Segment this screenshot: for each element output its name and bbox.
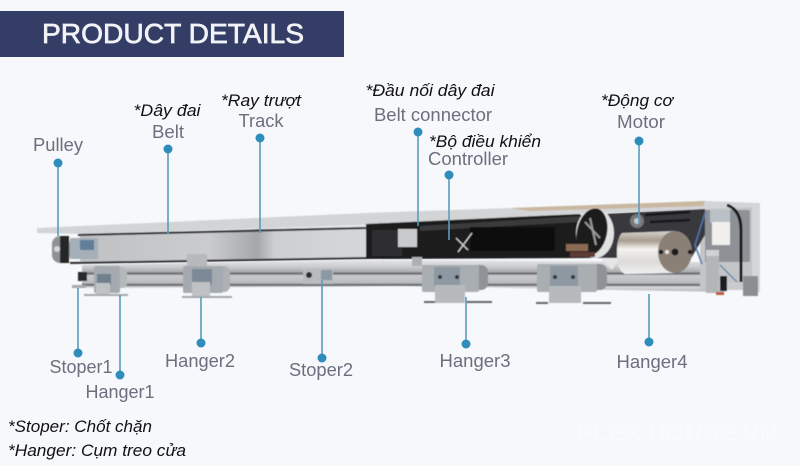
- callout: Hanger2: Hanger2: [165, 351, 235, 371]
- callout: Motor: [601, 91, 675, 224]
- callout: Controller: Controller: [428, 149, 508, 169]
- callout: Track: [221, 91, 302, 233]
- title: PRODUCT DETAILS: [42, 18, 304, 49]
- footnotes: *Stoper: Chốt chặn: [8, 417, 152, 436]
- callout: Hanger2: [165, 297, 235, 371]
- right wall: [752, 204, 760, 293]
- footnotes: *Hanger: Cụm treo cửa: [8, 441, 186, 460]
- controller: [366, 214, 585, 266]
- callout: Motor: *Động cơ: [601, 91, 675, 110]
- belt: [70, 228, 368, 263]
- callout: Hanger3: [440, 297, 510, 371]
- callout: Controller: *Bộ điều khiển: [429, 132, 541, 151]
- callout: Pulley: Pulley: [33, 135, 83, 155]
- door operator machine: [37, 201, 760, 304]
- callout: Hanger1: [86, 295, 154, 402]
- callout: Belt connector: [366, 81, 496, 226]
- watermark: FLEX HOUSE.VN: [577, 420, 777, 446]
- stoper 1: [72, 272, 87, 288]
- callout: Controller: [428, 132, 541, 240]
- callout: Motor: Motor: [617, 112, 665, 132]
- right interior: [700, 204, 758, 290]
- lower rail: [82, 260, 725, 292]
- callout: Stoper2: [289, 280, 353, 380]
- callout: Stoper1: [50, 288, 112, 377]
- motor bay: [580, 209, 705, 260]
- hanger 4: [536, 264, 611, 304]
- callout: Stoper2: Stoper2: [289, 360, 353, 380]
- callout: Pulley: [33, 135, 83, 236]
- top cover plate: [37, 201, 760, 234]
- callout: Track: Track: [238, 111, 285, 131]
- callout: Stoper1: Stoper1: [50, 357, 112, 377]
- right bracket: [695, 205, 758, 296]
- hanger 1: [84, 266, 128, 296]
- callout: Belt connector: *Đầu nối dây đai: [366, 81, 496, 100]
- track body: [80, 226, 366, 262]
- stoper 2: [303, 270, 333, 284]
- callout: Belt connector: Belt connector: [374, 105, 492, 125]
- callout: Belt: Belt: [152, 122, 184, 142]
- hanger 2: [182, 254, 232, 298]
- pulley: [52, 236, 98, 263]
- gear wheel: [566, 205, 614, 259]
- callout: Hanger1: Hanger1: [86, 382, 154, 402]
- callout: Track: *Ray trượt: [221, 91, 302, 110]
- callout: Belt: [134, 101, 202, 234]
- motor: [600, 231, 692, 274]
- callout: Belt: *Dây đai: [134, 101, 202, 120]
- callout: Hanger4: Hanger4: [616, 352, 688, 372]
- title: [0, 11, 344, 57]
- footnotes: [8, 417, 186, 460]
- hanger 3: [422, 265, 492, 303]
- callout: Hanger4: [616, 294, 688, 372]
- callout: Hanger3: Hanger3: [440, 351, 510, 371]
- small top pulley and wires: [630, 212, 690, 228]
